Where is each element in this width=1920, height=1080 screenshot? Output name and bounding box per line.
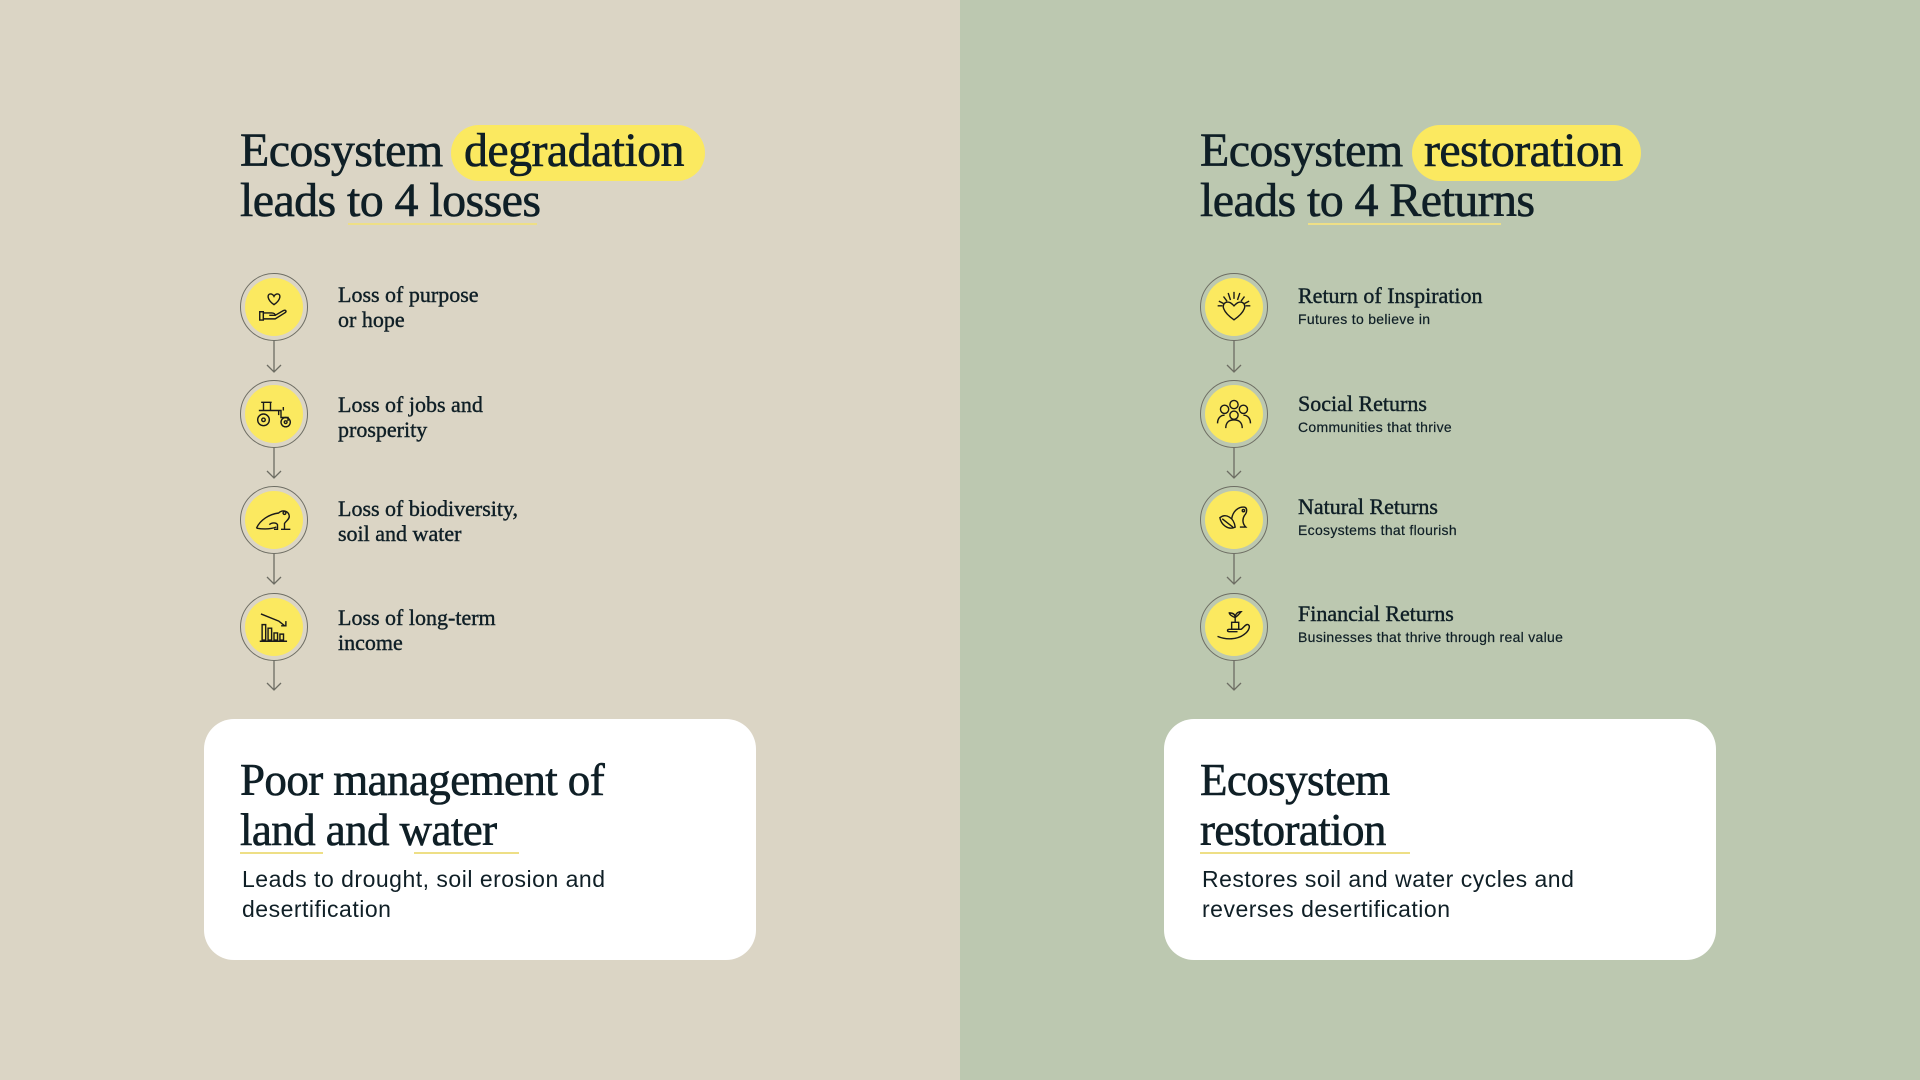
card title: Poor management of [240, 755, 604, 805]
flow arrows [1226, 341, 1242, 691]
card body: reverses desertification [1202, 896, 1450, 922]
icon: hand with plant [1200, 593, 1268, 661]
text: financial: Businesses that thrive through real value [1298, 629, 1563, 645]
icon: leaf frog [1200, 486, 1268, 554]
title: leads to 4 Returns [1200, 174, 1534, 227]
icon: hand heart [240, 273, 308, 341]
card: ecosystem restoration [1164, 719, 1716, 960]
card body: Restores soil and water cycles and [1202, 866, 1574, 892]
text: loss of purpose: or hope [338, 307, 405, 332]
text: loss of jobs [338, 392, 483, 442]
icon: tractor [240, 380, 308, 448]
card title [1200, 755, 1390, 855]
text: social: Social Returns [1298, 391, 1427, 416]
card title: land and water [240, 805, 496, 855]
card title [240, 755, 606, 855]
card title: restoration [1200, 805, 1386, 855]
panel: restoration [960, 0, 1920, 1080]
card underline [240, 852, 323, 854]
text: social: Communities that thrive [1298, 419, 1452, 435]
text: loss of purpose [338, 282, 479, 332]
card title: Ecosystem [1200, 755, 1390, 805]
text: loss of income: income [338, 630, 403, 655]
title [1200, 124, 1623, 227]
text: financial: Financial Returns [1298, 601, 1454, 626]
icon: radiant heart [1200, 273, 1268, 341]
card underline [1200, 852, 1410, 854]
card body [1202, 866, 1574, 922]
card: poor management [204, 719, 756, 960]
text: loss of biodiversity: Loss of biodiversity, [338, 496, 518, 521]
text: inspiration: Return of Inspiration [1298, 283, 1483, 308]
title underline [348, 223, 537, 225]
title: Ecosystem degradation [240, 124, 684, 177]
text: loss of biodiversity [338, 496, 518, 546]
text: inspiration [1298, 283, 1483, 327]
icon: frog [240, 486, 308, 554]
flow arrows [266, 341, 282, 691]
text: inspiration: Futures to believe in [1298, 311, 1430, 327]
text: financial [1298, 601, 1563, 646]
title: leads to 4 losses [240, 174, 540, 227]
text: natural [1298, 494, 1457, 538]
text: loss of income [338, 605, 496, 655]
text: loss of purpose: Loss of purpose [338, 282, 479, 307]
text: loss of biodiversity: soil and water [338, 521, 461, 546]
text: natural: Natural Returns [1298, 494, 1438, 519]
title highlight [451, 125, 705, 181]
icon: people [1200, 380, 1268, 448]
card body: Leads to drought, soil erosion and [242, 866, 606, 892]
text: natural: Ecosystems that flourish [1298, 522, 1457, 538]
text: loss of jobs: Loss of jobs and [338, 392, 483, 417]
card body: desertification [242, 896, 391, 922]
icon: declining chart [240, 593, 308, 661]
panel: degradation [0, 0, 960, 1080]
text: loss of income: Loss of long-term [338, 605, 496, 630]
text: loss of jobs: prosperity [338, 417, 427, 442]
text: social [1298, 391, 1452, 435]
card body [242, 866, 606, 922]
title highlight [1412, 125, 1641, 181]
title: Ecosystem restoration [1200, 124, 1623, 177]
title [240, 124, 684, 227]
title underline [1308, 223, 1501, 225]
